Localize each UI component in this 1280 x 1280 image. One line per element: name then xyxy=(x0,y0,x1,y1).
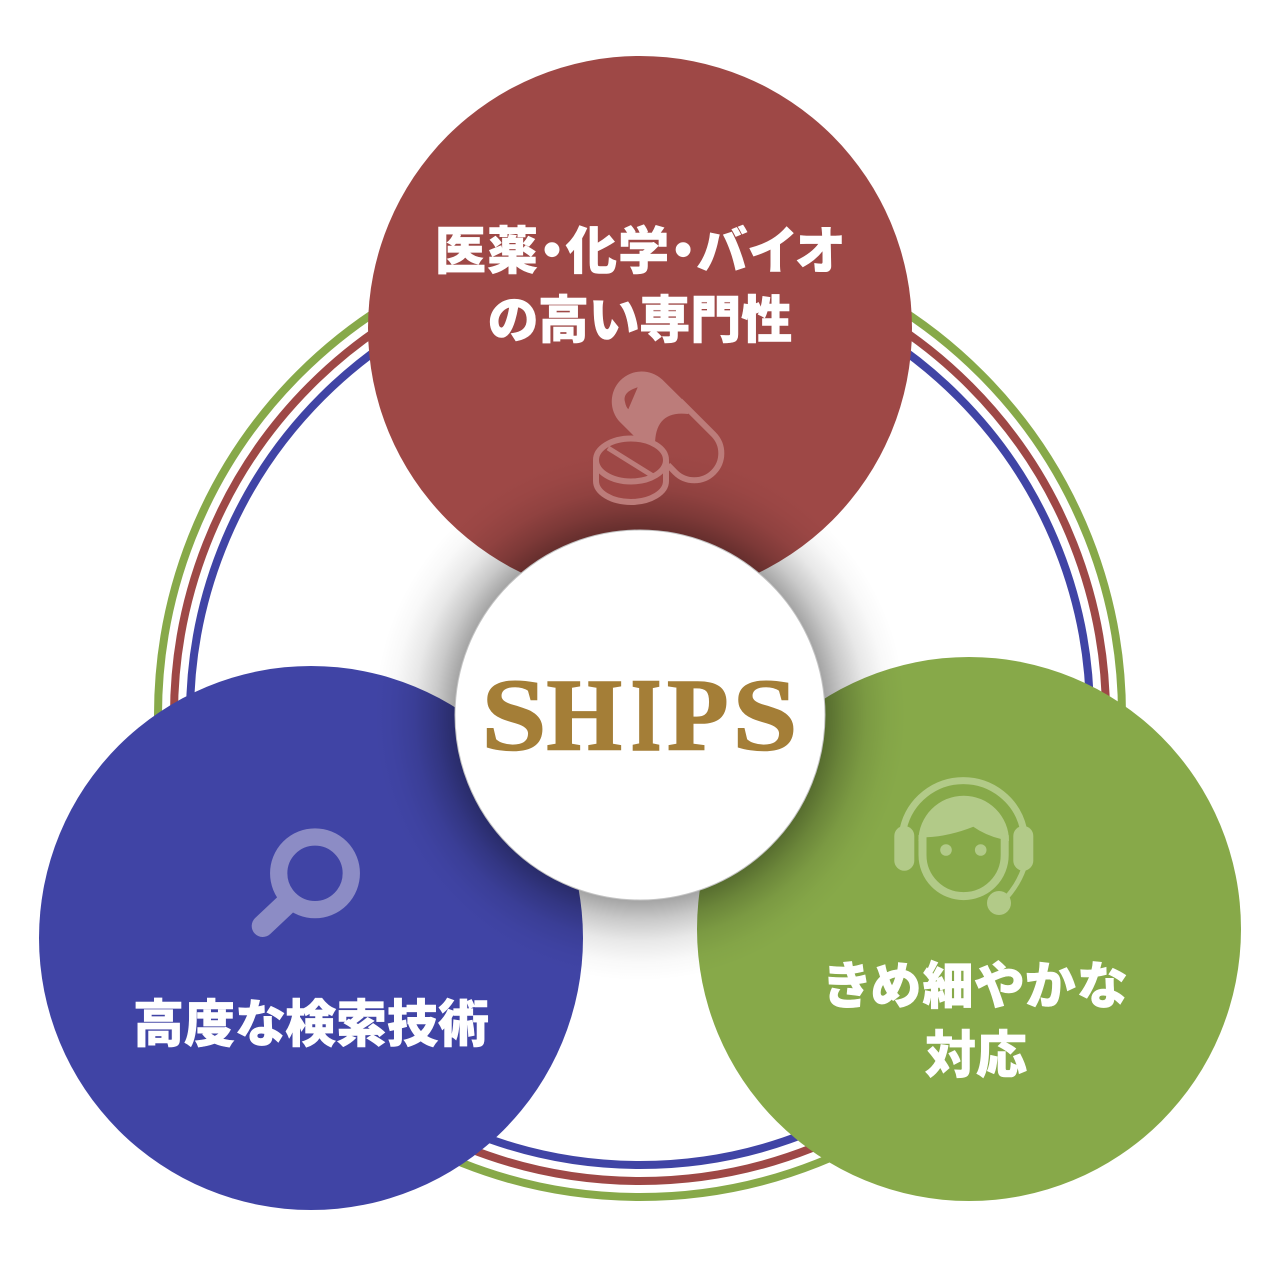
panel: red circle xyxy=(368,56,912,600)
SHIPS logo: S xyxy=(732,658,798,772)
shadow around center circle xyxy=(374,449,906,981)
SHIPS logo: S xyxy=(482,658,546,772)
icon: magnifier xyxy=(263,837,351,926)
panel: green circle xyxy=(697,657,1241,1201)
SHIPS logo: P xyxy=(667,658,728,772)
concentric rings xyxy=(158,233,1122,1197)
heading: red circle: の高い専門性 xyxy=(488,292,792,349)
heading: red circle xyxy=(435,223,845,349)
heading: red circle: 医薬・化学・バイオ xyxy=(435,223,845,280)
center circle xyxy=(455,530,825,900)
SHIPS logo xyxy=(482,658,798,772)
SHIPS logo: H xyxy=(546,658,622,772)
heading: green circle: きめ細やかな xyxy=(825,958,1128,1015)
icon: headset operator xyxy=(894,781,1033,915)
SHIPS logo: I xyxy=(631,658,661,772)
heading: green circle: 対応 xyxy=(925,1027,1027,1084)
panel: blue circle xyxy=(39,666,583,1210)
heading: green circle xyxy=(825,958,1128,1084)
heading: blue circle: 高度な検索技術 xyxy=(133,996,489,1053)
icon: pills xyxy=(596,371,721,502)
